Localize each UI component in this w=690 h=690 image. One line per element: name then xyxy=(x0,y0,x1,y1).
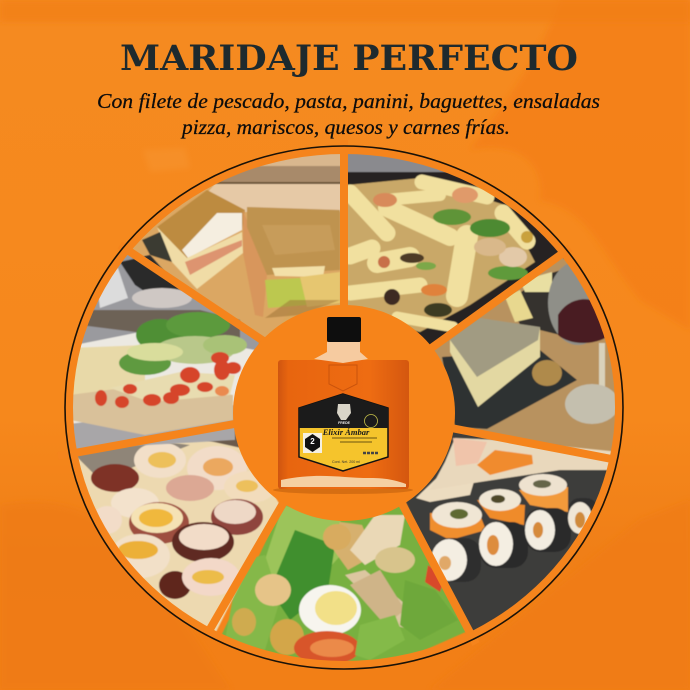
warning badge: 2 xyxy=(310,437,315,446)
wheel outline xyxy=(65,146,623,669)
label volume: Cont. Net. 200 ml xyxy=(332,460,360,464)
photos xyxy=(60,140,625,670)
title: MARIDAJE PERFECTO xyxy=(120,38,578,79)
center circle xyxy=(233,305,455,521)
label xyxy=(299,394,388,471)
photo: cheese and wine xyxy=(434,258,615,454)
label logo xyxy=(337,404,351,420)
bottle body xyxy=(278,360,409,489)
bottle neck xyxy=(314,342,368,363)
label rating xyxy=(363,452,378,454)
spoke dividers xyxy=(58,140,622,644)
photo: sushi xyxy=(406,432,611,630)
wheel base xyxy=(65,146,623,669)
label: FREDE xyxy=(338,421,351,425)
subtitle xyxy=(97,89,600,139)
subtitle: Con filete de pescado, pasta, panini, baguettes, ensaladas xyxy=(97,89,600,113)
photo: octopus xyxy=(78,430,279,632)
bottle shadow xyxy=(273,486,413,494)
label name: Elixir Ámbar xyxy=(322,427,370,437)
bottle emboss xyxy=(329,365,357,391)
bottle xyxy=(273,317,413,494)
photo: pasta xyxy=(347,150,570,350)
bottle base glass xyxy=(281,476,406,487)
bottle cap xyxy=(327,317,361,342)
photo: sandwich xyxy=(124,154,340,337)
label seal xyxy=(364,414,378,428)
label description lines xyxy=(332,438,377,442)
photo: bruschetta xyxy=(60,250,260,450)
subtitle: pizza, mariscos, quesos y carnes frías. xyxy=(180,115,510,139)
pairing wheel xyxy=(58,140,625,670)
photo: salad xyxy=(222,505,466,661)
sushi rolls xyxy=(430,474,598,582)
